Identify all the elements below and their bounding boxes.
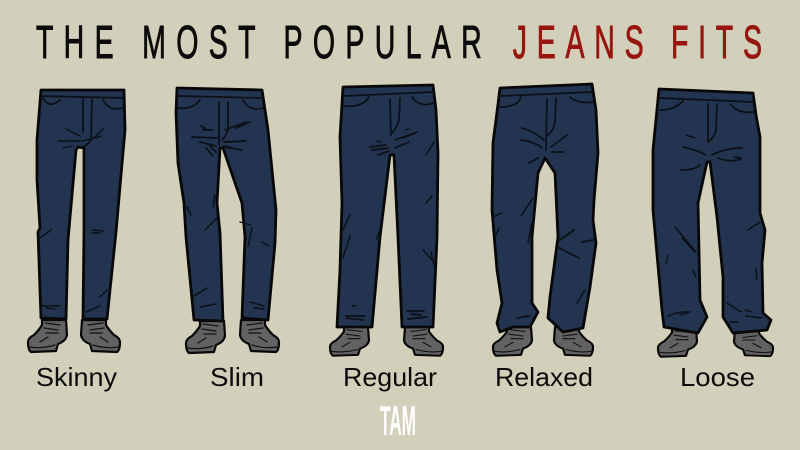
label: Loose: Loose: [680, 362, 755, 392]
slim jeans: [176, 88, 276, 321]
relaxed shoes: [493, 327, 593, 356]
label: Relaxed: Relaxed: [495, 362, 593, 392]
slim shoes: [186, 320, 279, 353]
skinny jeans: [37, 90, 125, 319]
regular jeans illustration: [330, 85, 443, 356]
regular jeans: [337, 85, 438, 327]
text: TAM: [380, 397, 416, 444]
loose jeans illustration: [653, 89, 773, 357]
relaxed jeans illustration: [492, 84, 598, 356]
title: [36, 17, 762, 69]
title: THE MOST POPULAR: [36, 17, 482, 69]
label: Slim: Slim: [210, 362, 264, 392]
title: JEANS FITS: [513, 17, 762, 69]
relaxed jeans: [492, 84, 598, 332]
regular shoes: [330, 327, 443, 356]
skinny shoes: [28, 320, 120, 352]
loose shoes: [658, 328, 773, 357]
slim jeans illustration: [176, 88, 279, 353]
loose jeans: [653, 89, 771, 333]
label: Skinny: Skinny: [36, 362, 117, 392]
skinny jeans illustration: [28, 90, 125, 352]
label: Regular: Regular: [343, 362, 437, 392]
